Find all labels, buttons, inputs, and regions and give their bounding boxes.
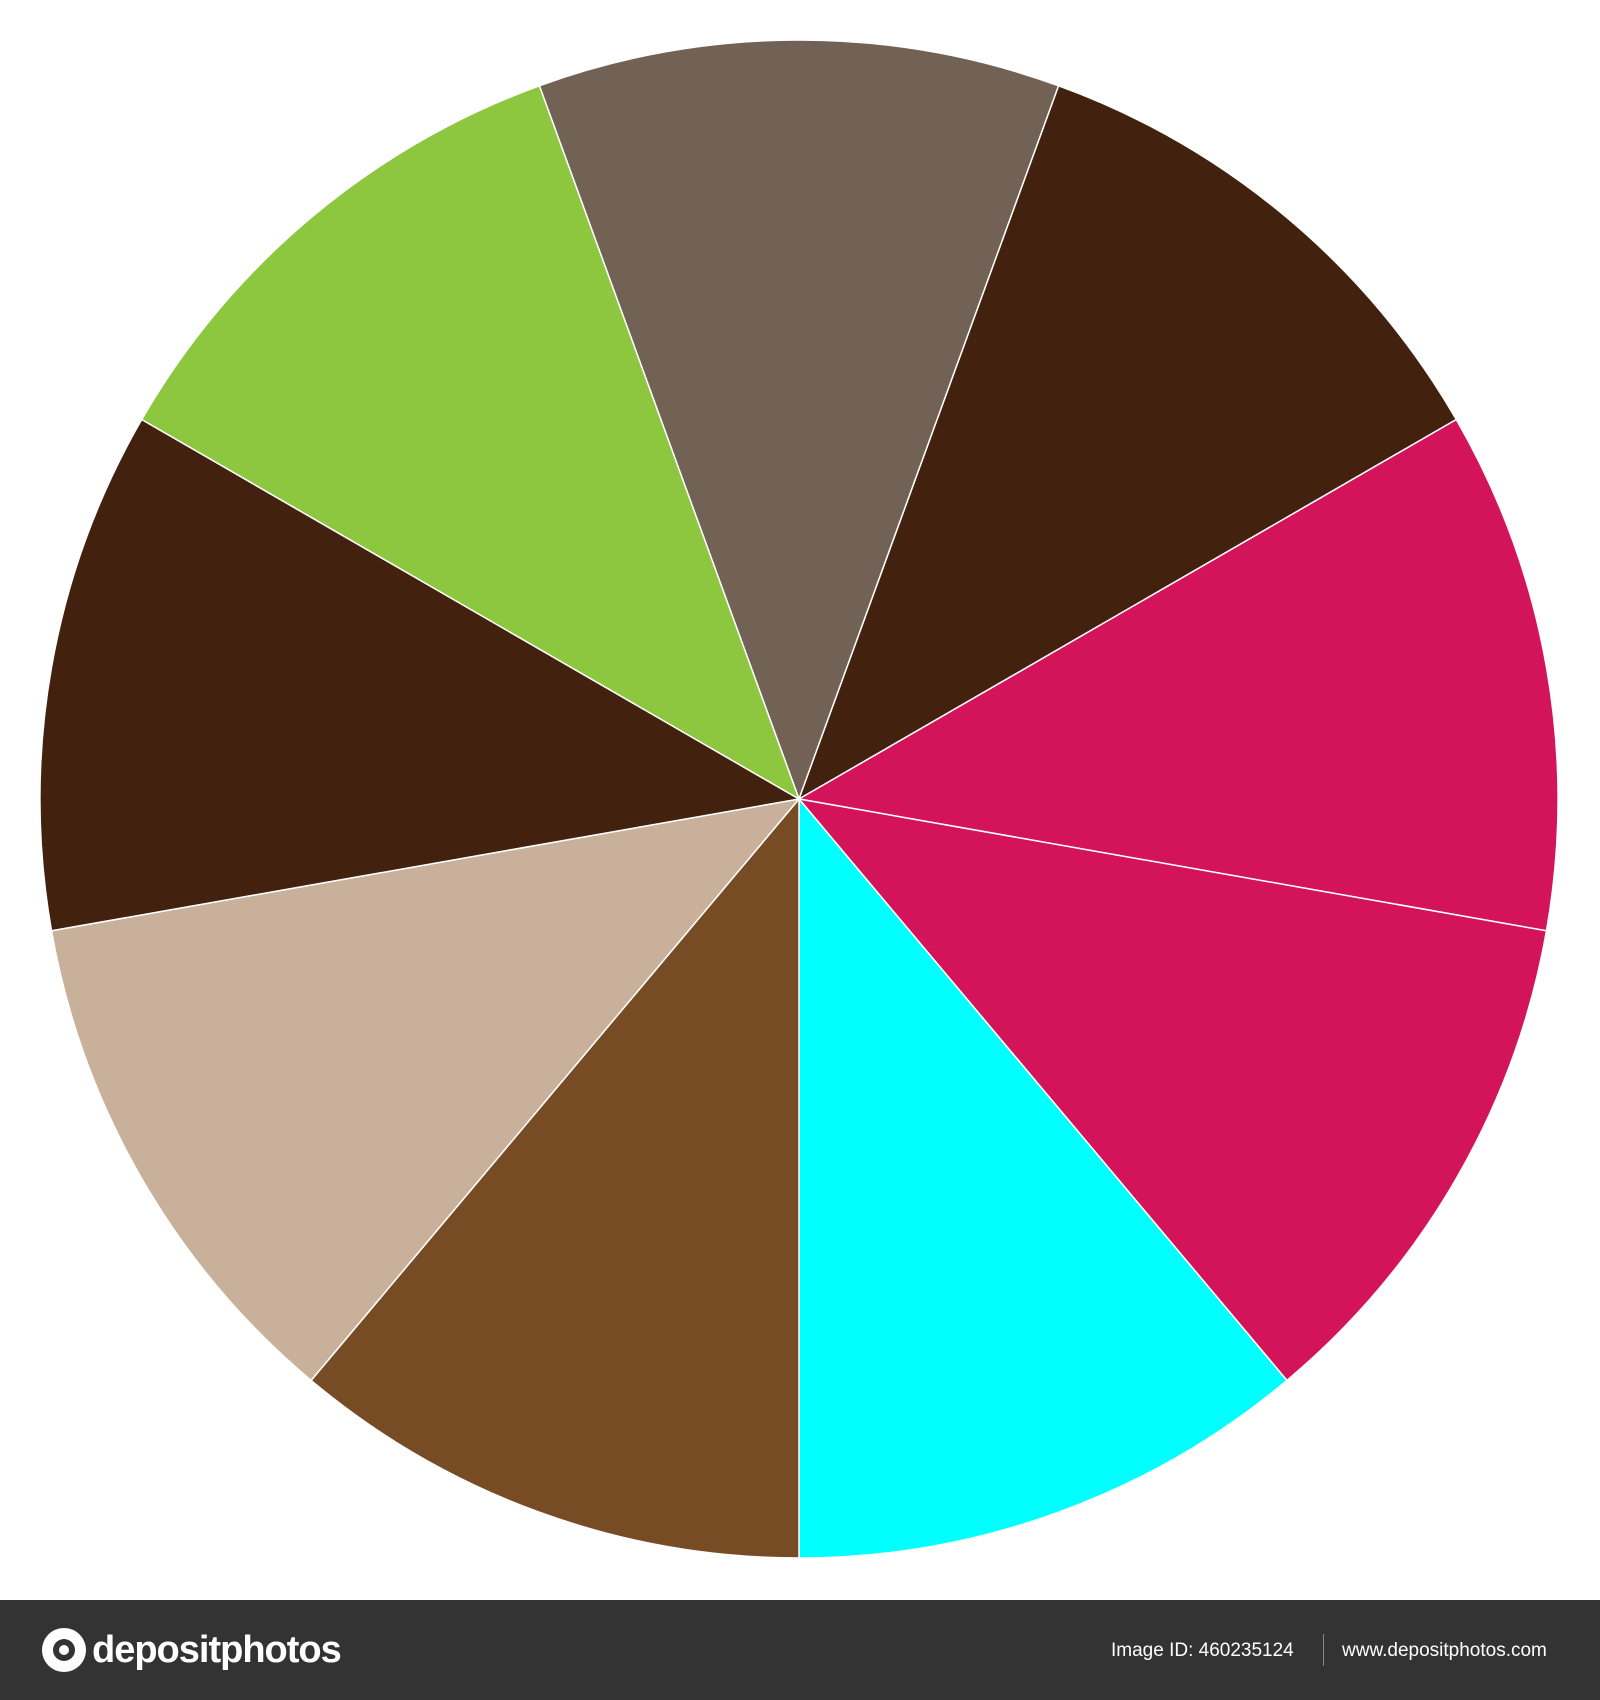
url: www.depositphotos.com xyxy=(1342,1640,1547,1661)
slice: magenta right lower xyxy=(799,799,1546,1380)
logo: depositphotos xyxy=(92,1628,341,1670)
slice: tan xyxy=(52,799,799,1380)
icon: camera logo xyxy=(42,1628,86,1672)
image id: Image ID: 460235124 xyxy=(1111,1640,1294,1661)
slice: cyan xyxy=(799,799,1287,1558)
slice: green xyxy=(142,86,799,799)
slice: gray top xyxy=(539,40,1059,799)
slice: dark brown left xyxy=(40,420,799,931)
slice: brown xyxy=(311,799,799,1558)
footer bar xyxy=(0,1600,1600,1700)
slice: dark brown upper right xyxy=(799,86,1456,799)
slice: magenta right upper xyxy=(799,420,1558,931)
